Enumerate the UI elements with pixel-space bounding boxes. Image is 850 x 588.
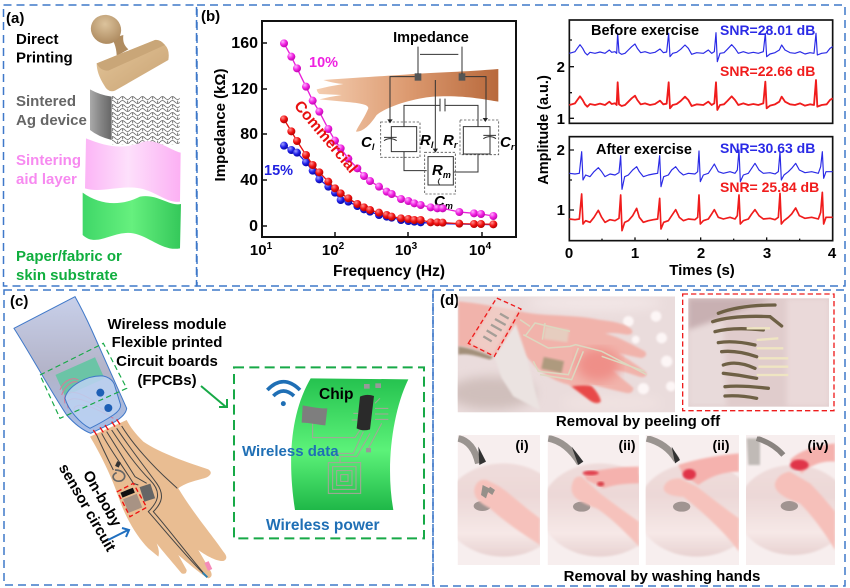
- label: (i): (i): [515, 437, 529, 453]
- arrow: green to zoomed module: [201, 386, 227, 407]
- text: sintering aid layer: Sintering: [16, 152, 81, 169]
- text: removal by washing hands: Removal by washing hands: [564, 568, 760, 585]
- text: wireless module label: Flexible printed: [112, 334, 222, 351]
- label: (iv): (iv): [808, 437, 828, 453]
- photo: washing (iv): [746, 435, 835, 565]
- text: direct printing: Printing: [16, 50, 73, 66]
- amplitude ticks: 1: [557, 202, 565, 219]
- illustration: hand with sensor circuit: [90, 420, 226, 578]
- arrow: blue: [108, 528, 129, 540]
- panel: (c) wireless module and body circuit: [4, 290, 433, 585]
- text: Cr: C: [500, 134, 511, 151]
- amplitude ticks: 2: [557, 59, 565, 76]
- chart: impedance vs frequency: [212, 21, 516, 280]
- plot: before exercise: [569, 20, 833, 123]
- chart: ECG amplitude: [536, 20, 837, 279]
- photo: washing (ii) second: [646, 435, 739, 565]
- label: Commercial: Commercial: [290, 98, 360, 177]
- amplitude ticks: 1: [557, 111, 565, 128]
- text: substrate: Paper/fabric or: [16, 248, 122, 265]
- label: 15%: 15%: [264, 163, 293, 179]
- text: before exercise: Before exercise: [591, 23, 699, 39]
- text: Rl: R: [420, 132, 431, 149]
- x-axis tick labels: 3: [412, 241, 418, 252]
- text: wireless module label: (FPCBs): [137, 372, 197, 389]
- x-axis tick labels: 10: [395, 242, 412, 259]
- text: Rl: l: [431, 140, 434, 150]
- text: SNR red after: SNR= 25.84 dB: [720, 179, 819, 195]
- text: SNR red before: SNR=22.66 dB: [720, 63, 815, 79]
- text: Cl: l: [372, 142, 375, 152]
- text: wireless power: Wireless power: [266, 517, 380, 534]
- y-axis labels: 0: [249, 218, 258, 235]
- text: wireless data: Wireless data: [242, 443, 339, 460]
- panel: (b) impedance and ECG: [197, 5, 845, 286]
- circuit traces: [313, 398, 388, 493]
- text: Cl: C: [361, 134, 372, 151]
- callout: zoomed wireless module: [234, 367, 424, 538]
- text: Cm: m: [445, 201, 453, 211]
- icon: green substrate: [83, 193, 181, 249]
- photo: washing (i): [458, 435, 540, 565]
- label: (ii): (ii): [618, 437, 636, 453]
- text: removal by peeling off: Removal by peeling off: [556, 413, 721, 430]
- photo: peeled circuit closeup: [688, 298, 829, 407]
- callout: red dashed on wrist: [468, 298, 521, 356]
- time ticks: 4: [828, 245, 837, 262]
- series: 10% magenta: [280, 39, 497, 220]
- label: (ii) second: (ii): [712, 437, 730, 453]
- panel label b: (b): [201, 8, 220, 25]
- y-axis labels: 120: [231, 81, 258, 98]
- y-axis title: Impedance (kΩ): [212, 69, 229, 181]
- flexible board: [291, 378, 408, 510]
- panel label d: (d): [440, 292, 459, 309]
- label: 10%: 10%: [309, 55, 338, 71]
- text: sensor circuit: sensor circuit: [55, 461, 119, 555]
- text: substrate: skin substrate: [16, 267, 118, 284]
- amplitude ticks: 2: [557, 142, 565, 159]
- text: on-body sensor circuit: On-boby: [79, 468, 125, 530]
- series: commercial red: [280, 115, 497, 228]
- y-axis title: Amplitude (a.u.): [536, 75, 552, 185]
- x-axis tick labels: 10: [250, 242, 267, 259]
- panel label c: (c): [10, 293, 28, 310]
- text: Rr: r: [454, 140, 458, 150]
- x-axis title: Times (s): [669, 262, 735, 279]
- text: Cr: r: [511, 142, 515, 152]
- time ticks: 0: [565, 245, 573, 262]
- icon: stamp: [86, 10, 169, 91]
- text: wireless module label: Wireless module: [107, 316, 227, 333]
- text: wireless module label: Circuit boards: [116, 353, 218, 370]
- text: sintered Ag device: Sintered: [16, 93, 76, 110]
- x-axis tick labels: 10: [469, 242, 486, 259]
- y-axis labels: 160: [231, 35, 258, 52]
- text: SNR blue before: SNR=28.01 dB: [720, 22, 815, 38]
- illustration: wireless sleeve: [14, 297, 127, 435]
- icon: sintered Ag mesh: [90, 89, 180, 144]
- photo: washing (ii): [548, 435, 639, 565]
- text: sintered Ag device: Ag device: [16, 112, 87, 129]
- text: Rm: R: [432, 162, 443, 179]
- text: impedance: Impedance: [393, 30, 469, 46]
- time ticks: 2: [697, 245, 705, 262]
- callout: red dashed closeup border: [683, 294, 834, 411]
- text: sintering aid layer: aid layer: [16, 171, 77, 188]
- plot: after exercise: [569, 137, 833, 241]
- text: chip: Chip: [319, 386, 353, 403]
- time ticks: 1: [631, 245, 639, 262]
- icon: wifi: [267, 382, 300, 406]
- panel: (d) removal: [433, 290, 849, 586]
- icon: pink sintering layer: [85, 138, 181, 202]
- y-axis labels: 40: [240, 172, 258, 189]
- text: after exercise: After exercise: [596, 142, 692, 158]
- panel: (a) direct printing layers: [4, 5, 196, 286]
- series: 15% blue: [280, 142, 493, 226]
- x-axis tick labels: 1: [267, 241, 273, 252]
- photo: hand peeling: [448, 295, 676, 412]
- text: Rm: m: [443, 170, 451, 180]
- x-axis tick labels: 10: [322, 242, 339, 259]
- x-axis tick labels: 2: [339, 241, 345, 252]
- text: SNR blue after: SNR=30.63 dB: [720, 140, 815, 156]
- y-axis labels: 80: [240, 126, 258, 143]
- x-axis title: Frequency (Hz): [333, 263, 445, 280]
- time ticks: 3: [763, 245, 771, 262]
- panel label a: (a): [6, 10, 24, 27]
- x-axis tick labels: 4: [486, 241, 492, 252]
- text: Rr: R: [443, 132, 454, 149]
- inset: arm with electrodes and circuit: [317, 47, 499, 194]
- text: direct printing: Direct: [16, 31, 59, 48]
- text: Cm: C: [434, 193, 445, 210]
